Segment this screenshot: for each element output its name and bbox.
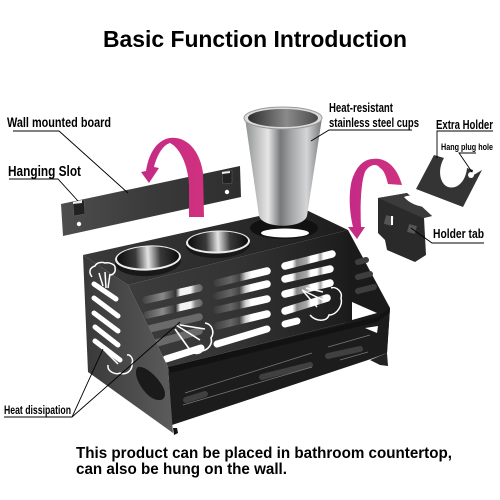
icon: heat cloud top left	[90, 262, 115, 288]
caption: This product can be placed in bathroom countertop,	[76, 445, 452, 462]
rack shelf lines	[183, 335, 370, 405]
holder bracket	[378, 193, 432, 262]
rack shelf white sliver	[365, 326, 378, 333]
arrow: left pink curved arrow	[141, 138, 204, 217]
slot: right group short row	[285, 321, 297, 324]
label: heat dissipation: Heat dissipation	[4, 403, 71, 417]
rack shelf slot marks	[186, 349, 360, 400]
label: holder tab: Holder tab	[433, 226, 484, 241]
slots: right group	[285, 254, 332, 311]
rack front upper panel	[128, 230, 348, 367]
slots: middle group	[217, 271, 267, 326]
label: wall mounted board	[7, 115, 128, 193]
label: hang plug hole	[441, 142, 493, 172]
icon: heat cloud middle	[175, 323, 213, 353]
label: hanging slot: Hanging Slot	[8, 164, 81, 180]
label: heat-resistant stainless steel cups: stainless steel cups	[329, 116, 419, 130]
wall mounted board	[61, 166, 241, 236]
icon: cup hole left with steel cup	[114, 244, 182, 278]
icon: right hanging slot	[222, 170, 232, 194]
holder tabs	[384, 215, 417, 234]
slots: left group lower	[149, 317, 199, 344]
icon: heat cloud right	[302, 288, 341, 320]
rack right opening	[352, 302, 377, 320]
extra holder	[378, 155, 482, 262]
slots: left group	[146, 288, 199, 315]
label: heat-resistant stainless steel cups	[311, 101, 419, 141]
stainless steel cup	[244, 107, 322, 226]
slots: bottom long white row	[166, 329, 267, 359]
rack interior right	[345, 230, 390, 360]
title: Basic Function Introduction	[103, 26, 407, 52]
rack	[83, 207, 390, 435]
label: extra holder	[436, 118, 493, 158]
rack interior blurred slots	[358, 260, 374, 291]
arrow: right pink curved arrow	[348, 159, 402, 239]
holder top plate	[416, 155, 482, 207]
label: heat-resistant stainless steel cups: Heat-resistant	[329, 101, 394, 115]
label: wall mounted board: Wall mounted board	[7, 115, 111, 130]
caption: can also be hung on the wall.	[76, 461, 287, 478]
rack top face	[83, 207, 348, 285]
icon: cup hole right	[250, 217, 318, 239]
rack left side panel	[83, 255, 173, 433]
label: hanging slot	[8, 164, 81, 201]
label: holder tab	[411, 226, 484, 243]
icon: heat cloud bottom left	[105, 350, 133, 374]
icon: left hanging slot	[73, 200, 85, 226]
icon: cup hole middle with steel cup	[186, 229, 250, 259]
left panel oval hole	[136, 367, 165, 400]
holder cutout	[404, 196, 427, 207]
rack lower shelf	[168, 308, 390, 425]
hang plug hole	[468, 172, 474, 178]
caption	[76, 445, 452, 478]
rack feet	[173, 428, 178, 435]
left panel slots	[94, 284, 120, 360]
label: heat dissipation	[4, 322, 180, 417]
